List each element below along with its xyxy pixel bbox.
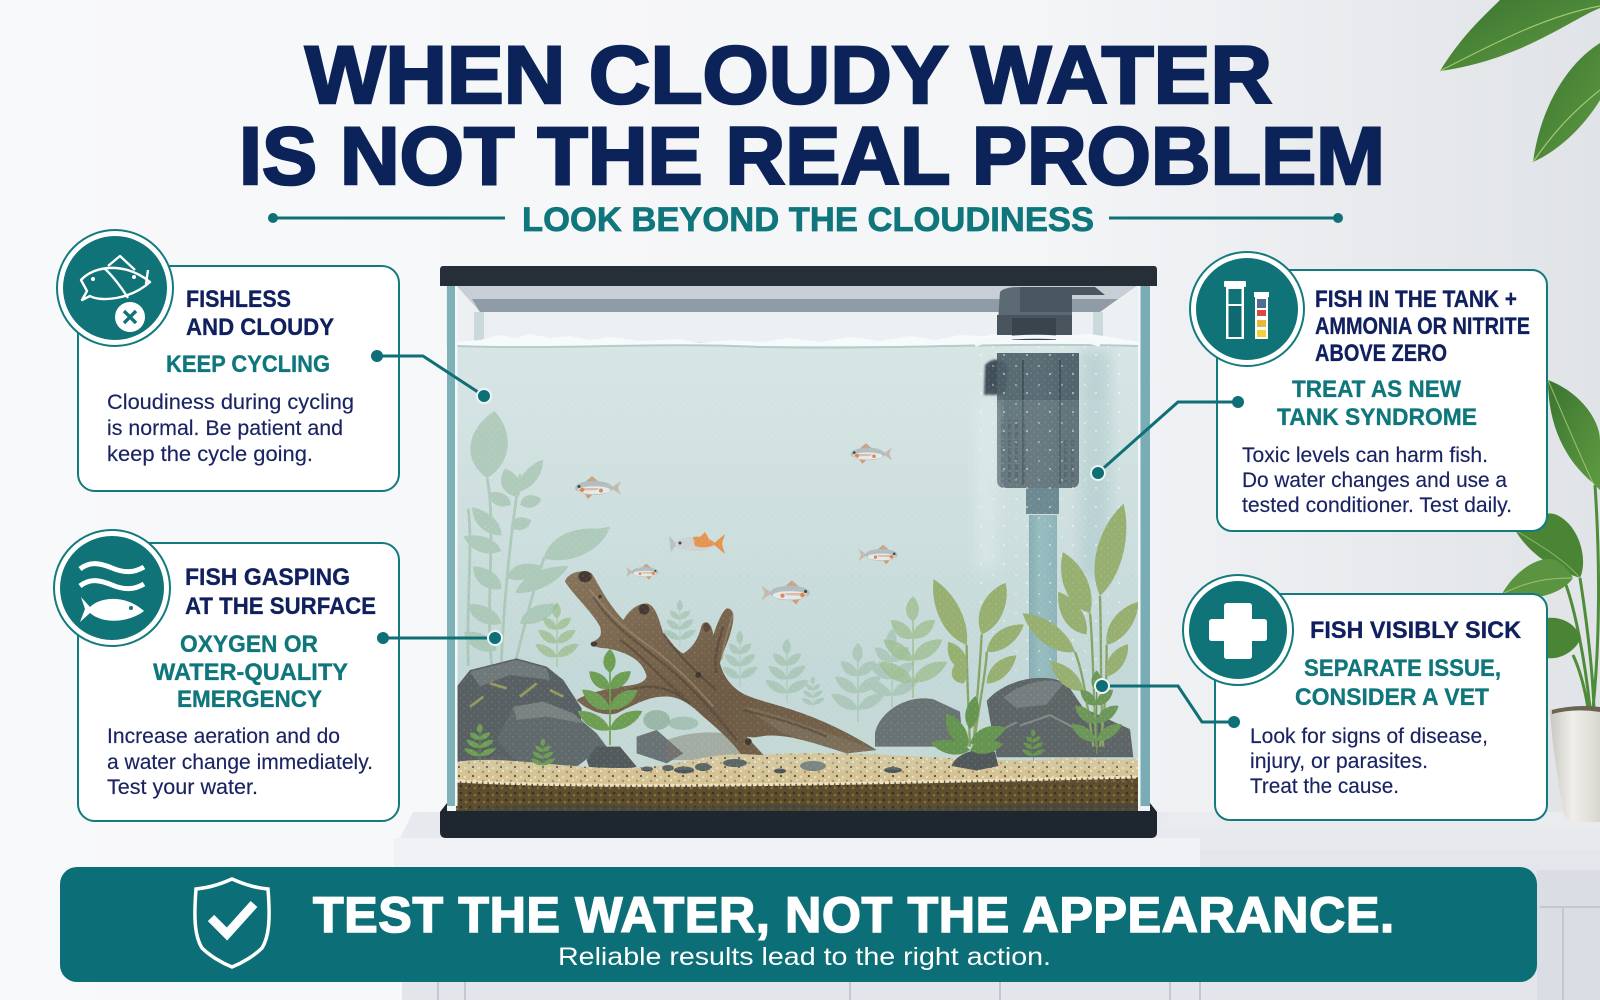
body text: injury, or parasites.	[1250, 749, 1428, 773]
icon: test vial and strip	[1190, 252, 1304, 366]
fresh green plant left	[462, 649, 645, 770]
icon: fish with x	[57, 230, 173, 346]
panel: fish gasping at the surface	[54, 530, 399, 821]
body text: Look for signs of disease,	[1250, 724, 1488, 748]
right potted plant	[1502, 380, 1600, 822]
panel: fishless and cloudy	[57, 230, 399, 491]
lid underside	[456, 285, 1138, 312]
heading: ABOVE ZERO	[1315, 340, 1447, 367]
heading	[1315, 286, 1530, 367]
action label: WATER-QUALITY	[153, 659, 348, 686]
body text: tested conditioner. Test daily.	[1242, 493, 1512, 517]
action label: TREAT AS NEW	[1292, 376, 1461, 403]
connector: ammonia card to tank	[1091, 396, 1244, 480]
action label: EMERGENCY	[177, 686, 322, 713]
heading: FISHLESS	[186, 286, 291, 313]
heading: FISH IN THE TANK +	[1315, 286, 1517, 313]
heading: AMMONIA OR NITRITE	[1315, 313, 1530, 340]
back glass posts	[474, 312, 1103, 345]
heading	[186, 286, 334, 341]
title	[239, 30, 1385, 202]
title: WHEN CLOUDY WATER	[305, 30, 1272, 121]
body text: Test your water.	[107, 775, 258, 799]
filter body	[975, 287, 1105, 488]
water haze and particles	[456, 347, 1138, 787]
fish school	[575, 443, 898, 605]
action label	[1295, 655, 1501, 711]
top right leaves	[1440, 0, 1600, 162]
connector: fishless card to water	[371, 350, 491, 403]
driftwood	[565, 571, 877, 758]
heading: FISH GASPING	[185, 564, 350, 591]
panel: fish visibly sick	[1183, 575, 1547, 820]
action label: OXYGEN OR	[180, 631, 318, 658]
icon: shield check	[195, 879, 269, 967]
pebbles	[641, 759, 902, 774]
center and right plants	[923, 500, 1145, 754]
action label: CONSIDER A VET	[1295, 684, 1489, 711]
right glass wall	[1138, 286, 1150, 806]
body text: Treat the cause.	[1250, 774, 1399, 798]
bubbles and mist around filter	[972, 345, 1122, 675]
top rim	[440, 266, 1157, 286]
body text: Do water changes and use a	[1242, 468, 1507, 492]
tank interior above water	[446, 285, 1150, 347]
bottom base	[440, 803, 1157, 838]
stems	[1566, 485, 1599, 708]
heading: AND CLOUDY	[186, 314, 334, 341]
icon: medical cross	[1183, 575, 1293, 685]
gravel bed	[456, 753, 1138, 812]
subtitle with rules	[268, 201, 1343, 239]
body text: Toxic levels can harm fish.	[1242, 443, 1488, 467]
action label: KEEP CYCLING	[166, 351, 330, 378]
bottom banner	[60, 867, 1537, 982]
banner subline: Reliable results lead to the right action.	[558, 943, 1051, 971]
body text: keep the cycle going.	[107, 442, 313, 466]
cabinet and counter	[394, 812, 1600, 1000]
rear small rocks and fresh plants	[637, 710, 743, 763]
rocks left	[457, 658, 637, 772]
connector: gasping card to tank	[377, 631, 502, 645]
water body	[456, 342, 1138, 812]
title: IS NOT THE REAL PROBLEM	[239, 111, 1385, 202]
filter pipe	[1026, 488, 1059, 680]
left glass wall	[447, 286, 458, 806]
banner headline: TEST THE WATER, NOT THE APPEARANCE.	[313, 887, 1394, 943]
body text: Cloudiness during cycling	[107, 390, 354, 414]
body text	[107, 390, 354, 466]
right rocks	[875, 678, 1133, 771]
background plants	[458, 410, 615, 666]
icon: waves and fish	[54, 530, 170, 646]
connector: sick fish card to tank	[1095, 679, 1240, 728]
heading: AT THE SURFACE	[185, 593, 376, 620]
action label	[1277, 376, 1477, 431]
action label: TANK SYNDROME	[1277, 404, 1477, 431]
heading	[185, 564, 376, 620]
body text	[107, 724, 373, 799]
body text: Increase aeration and do	[107, 724, 340, 748]
pot	[1550, 706, 1600, 822]
body text: is normal. Be patient and	[107, 416, 343, 440]
water surface foam	[456, 333, 1138, 346]
body text: a water change immediately.	[107, 750, 373, 774]
aquarium	[440, 266, 1157, 838]
leaves	[1548, 380, 1600, 490]
heading: FISH VISIBLY SICK	[1310, 617, 1522, 644]
body text	[1250, 724, 1488, 798]
subtitle with rules: LOOK BEYOND THE CLOUDINESS	[522, 201, 1094, 239]
panel: ammonia or nitrite above zero	[1190, 252, 1547, 531]
action label: SEPARATE ISSUE,	[1304, 655, 1501, 682]
action label	[153, 631, 348, 713]
body text	[1242, 443, 1512, 517]
